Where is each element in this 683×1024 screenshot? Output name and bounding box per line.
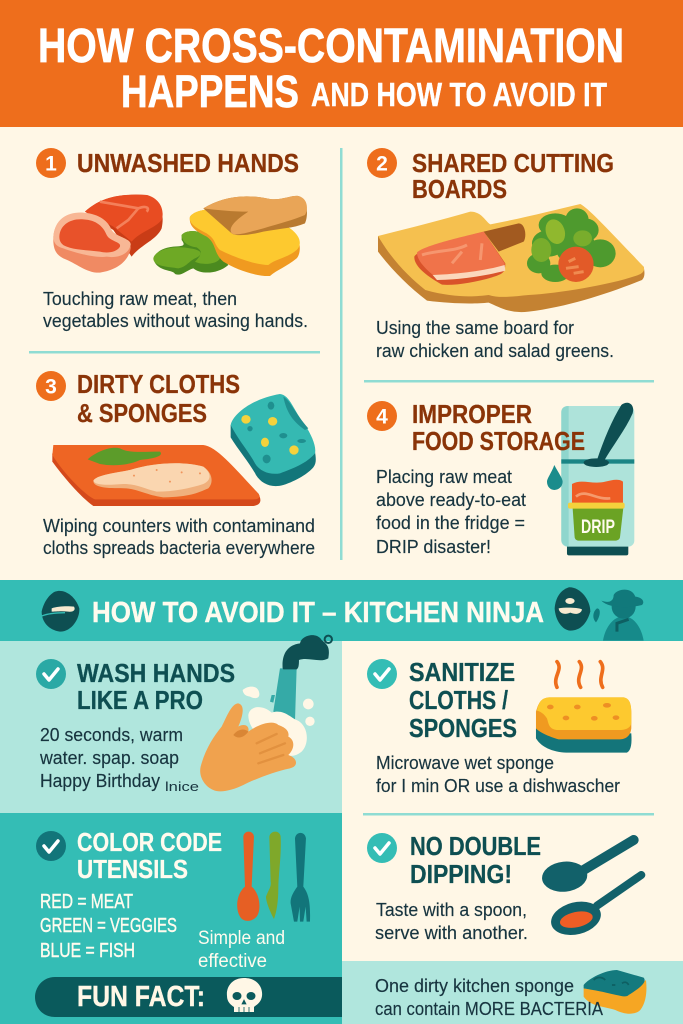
illustration: fridge with dripping meat (547, 403, 634, 555)
check icon (36, 831, 66, 861)
description: serve with another. (375, 922, 528, 943)
heading: dirty cloths and sponges: DIRTY CLOTHS (77, 369, 240, 399)
heading: sanitize (409, 657, 517, 743)
heading: shared cutting boards: SHARED CUTTING (412, 148, 614, 178)
description: Using the same board for (376, 317, 574, 338)
panel: wash hands like a pro (0, 635, 342, 813)
icon: ninja mask left (42, 591, 79, 632)
heading: unwashed hands: UNWASHED HANDS (77, 148, 299, 178)
description (375, 975, 604, 1019)
illustration: dirty board with chicken (52, 445, 260, 506)
description (376, 317, 614, 361)
number badge 1: 1 (45, 152, 57, 176)
check icon (367, 833, 397, 863)
number badge 1 (36, 148, 66, 178)
number badge 2 (367, 148, 397, 178)
number badge 4 (367, 401, 397, 431)
description (39, 724, 199, 794)
banner heading: HOW TO AVOID IT – KITCHEN NINJA (92, 597, 544, 629)
color key: BLUE = FISH (40, 940, 135, 962)
icon: skull (227, 978, 262, 1012)
icon: dirty sponge (584, 970, 646, 1014)
icon: colored utensils (237, 832, 310, 922)
description: for I min OR use a dishwascher (376, 775, 620, 796)
description: Taste with a spoon, (376, 899, 527, 920)
number badge 2: 2 (376, 152, 388, 176)
heading: dirty cloths and sponges: & SPONGES (77, 398, 207, 428)
description: food in the fridge = (376, 512, 525, 533)
description (375, 899, 528, 943)
description (43, 288, 308, 331)
heading: dirty cloths and sponges (77, 369, 240, 428)
heading: wash hands: WASH HANDS (77, 658, 235, 688)
heading: sanitize: CLOTHS / (409, 685, 508, 715)
color key: GREEN = VEGGIES (40, 915, 177, 937)
illustration: cutting board with meat, knife and salad (378, 204, 644, 312)
heading: no double dipping: DIPPING! (410, 859, 512, 889)
description: vegetables without wasing hands. (43, 310, 308, 331)
title banner: HAPPENS (121, 66, 299, 117)
check icon (36, 659, 66, 689)
description: water. spap. soap (39, 747, 179, 768)
heading: improper food storage: FOOD STORAGE (412, 426, 585, 456)
description: Touching raw meat, then (43, 288, 237, 309)
number badge 3 (36, 371, 66, 401)
description: 20 seconds, warm (40, 724, 183, 745)
description: can contain MORE BACTERIA (375, 998, 604, 1019)
title banner: AND HOW TO AVOID IT (311, 76, 607, 113)
check icon (367, 659, 397, 689)
description (376, 466, 526, 557)
note: effective (198, 951, 267, 972)
number badge 4: 4 (376, 406, 388, 428)
title banner (0, 0, 683, 127)
description: raw chicken and salad greens. (376, 340, 614, 361)
heading: wash hands: LIKE A PRO (77, 685, 203, 715)
heading: color code utensils (77, 827, 222, 884)
description: Placing raw meat (376, 466, 512, 487)
heading: sanitize: SPONGES (409, 713, 517, 743)
panel: improper food storage (367, 399, 634, 557)
color key (40, 891, 177, 962)
description: lnice (165, 779, 199, 794)
fun fact bar (35, 977, 683, 1017)
illustration: raw meat, vegetables and hand (53, 195, 307, 276)
description (376, 752, 620, 796)
icon: dirty sponge (231, 394, 316, 486)
note (198, 928, 285, 972)
description: One dirty kitchen sponge (375, 975, 574, 996)
panel: shared cutting boards (367, 148, 644, 361)
icon: ninja head and hatted figure (555, 587, 644, 641)
heading: improper food storage (412, 399, 585, 456)
description (43, 515, 315, 558)
section banner: how to avoid it (0, 580, 683, 641)
panel: no double dipping (367, 831, 641, 943)
description: Happy Birthday (40, 770, 161, 791)
fun fact bar: FUN FACT: (77, 981, 205, 1013)
label: DRIP: DRIP (581, 517, 615, 538)
note: Simple and (198, 928, 285, 949)
illustration: hands washing under faucet (200, 635, 332, 791)
panel: sanitize cloths and sponges (367, 657, 632, 796)
icon: two spoons (541, 840, 641, 940)
description: DRIP disaster! (376, 536, 491, 557)
heading: color code utensils: COLOR CODE (77, 827, 222, 857)
panel: fun fact detail (342, 961, 683, 1024)
panel: dirty cloths and sponges (36, 369, 316, 558)
heading: sanitize: SANITIZE (409, 657, 515, 687)
panel: unwashed hands (36, 148, 308, 331)
heading: shared cutting boards (412, 148, 614, 204)
description: above ready-to-eat (376, 489, 526, 510)
heading: no double dipping (410, 831, 541, 889)
description: Microwave wet sponge (376, 752, 554, 773)
color key: RED = MEAT (40, 891, 133, 913)
heading: wash hands (77, 658, 235, 715)
heading: no double dipping: NO DOUBLE (410, 831, 541, 861)
heading: improper food storage: IMPROPER (412, 399, 532, 429)
description: Wiping counters with contaminand (43, 515, 315, 536)
description: cloths spreads bacteria everywhere (43, 537, 315, 558)
number badge 3: 3 (45, 376, 57, 398)
panel: color code utensils (0, 813, 683, 1024)
heading: shared cutting boards: BOARDS (412, 174, 507, 204)
icon: steaming sponge (536, 662, 632, 753)
heading: color code utensils: UTENSILS (77, 854, 188, 884)
